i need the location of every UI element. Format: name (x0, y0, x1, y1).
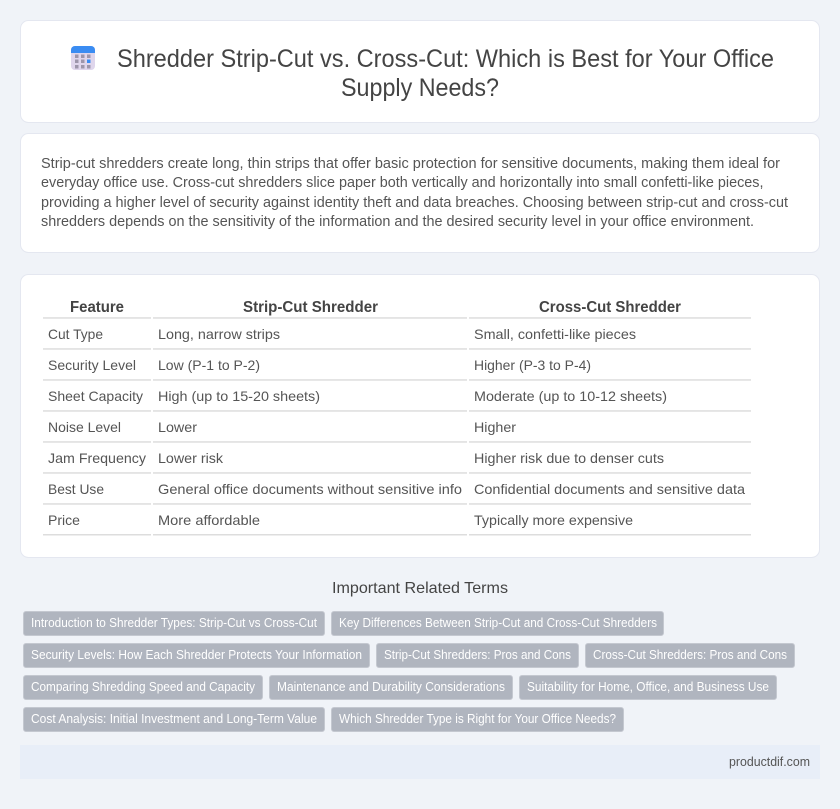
table row: best use (48, 481, 745, 497)
table row: price: More affordable (158, 512, 260, 528)
heading: important related terms: Important Related Terms (332, 580, 508, 597)
table row: security level: Security Level (48, 357, 136, 373)
tag: cross-cut pros and cons (586, 644, 794, 668)
table row: jam frequency: Higher risk due to denser cuts (474, 450, 664, 466)
tag: which shredder (332, 708, 624, 732)
text block: introduction (41, 156, 788, 230)
table header: Feature (70, 299, 124, 316)
table row: cut type: Small, confetti-like pieces (474, 326, 636, 342)
text block: introduction: everyday office use. Cross-cut shredders slice paper both vertically and horizontally into small confetti-like pieces, (41, 175, 764, 191)
panel: title card (20, 20, 820, 122)
panel: comparison table (20, 274, 820, 558)
tag: speed and capacity: Comparing Shredding Speed and Capacity (31, 680, 256, 694)
title (117, 45, 774, 102)
table header: Cross-Cut Shredder (539, 299, 681, 316)
table row: security level: Higher (P-3 to P-4) (474, 357, 591, 373)
table row: price (48, 512, 633, 528)
table header (70, 299, 681, 316)
table row: security level: Low (P-1 to P-2) (158, 357, 260, 373)
table row: best use: General office documents without sensitive info (158, 481, 462, 497)
tag: security levels: Security Levels: How Each Shredder Protects Your Information (31, 648, 362, 662)
tag: maintenance: Maintenance and Durability Considerations (277, 680, 505, 694)
tag: speed and capacity (24, 676, 262, 700)
title: Supply Needs? (341, 74, 499, 102)
text block: introduction: Strip-cut shredders create long, thin strips that offer basic protection for sensitive documents, making them ideal for (41, 156, 780, 172)
panel: introduction text (20, 134, 820, 252)
tag: introduction: Introduction to Shredder Types: Strip-Cut vs Cross-Cut (31, 616, 317, 630)
table row: sheet capacity: High (up to 15-20 sheets) (158, 388, 320, 404)
tag: introduction (24, 612, 324, 636)
table row: sheet capacity: Sheet Capacity (48, 388, 143, 404)
tag: strip-cut pros and cons (376, 644, 578, 668)
related terms tags (24, 612, 794, 732)
text block: introduction: shredders depends on the sensitivity of the information and the desired security level in your office environment. (41, 214, 754, 230)
table row: best use: Confidential documents and sensitive data (474, 481, 745, 497)
table row: price: Typically more expensive (474, 512, 633, 528)
table row: noise level: Higher (474, 419, 516, 435)
table row: security level (48, 357, 591, 373)
table row: jam frequency (48, 450, 664, 466)
tag: key differences (332, 612, 664, 636)
icon: calculator (71, 46, 95, 70)
table row: sheet capacity: Moderate (up to 10-12 sheets) (474, 388, 667, 404)
tag: strip-cut pros and cons: Strip-Cut Shredders: Pros and Cons (384, 648, 571, 662)
table header: Strip-Cut Shredder (243, 299, 378, 316)
tag: suitability: Suitability for Home, Office, and Business Use (527, 680, 769, 694)
table row: noise level (48, 419, 516, 435)
table row: sheet capacity (48, 388, 667, 404)
table row: jam frequency: Jam Frequency (48, 450, 146, 466)
table row: cut type: Cut Type (48, 326, 103, 342)
table row: cut type (48, 326, 636, 342)
tag: security levels (24, 644, 370, 668)
tag: cross-cut pros and cons: Cross-Cut Shredders: Pros and Cons (593, 648, 787, 662)
table row: noise level: Lower (158, 419, 197, 435)
table row: best use: Best Use (48, 481, 104, 497)
footer: productdif.com (729, 755, 810, 769)
text block: introduction: providing a higher level of security against identity theft and data breaches. Choosing between strip-cut and cross-cut (41, 195, 788, 211)
tag: key differences: Key Differences Between Strip-Cut and Cross-Cut Shredders (339, 616, 657, 630)
table row: noise level: Noise Level (48, 419, 121, 435)
tag: suitability (520, 676, 776, 700)
tag: which shredder: Which Shredder Type is Right for Your Office Needs? (339, 712, 616, 726)
footer (20, 745, 820, 779)
tag: maintenance (270, 676, 512, 700)
table row: cut type: Long, narrow strips (158, 326, 280, 342)
table row: jam frequency: Lower risk (158, 450, 224, 466)
tag: cost analysis (24, 708, 324, 732)
table row: price: Price (48, 512, 80, 528)
title: Shredder Strip-Cut vs. Cross-Cut: Which is Best for Your Office (117, 45, 774, 73)
tag: cost analysis: Cost Analysis: Initial Investment and Long-Term Value (31, 712, 317, 726)
